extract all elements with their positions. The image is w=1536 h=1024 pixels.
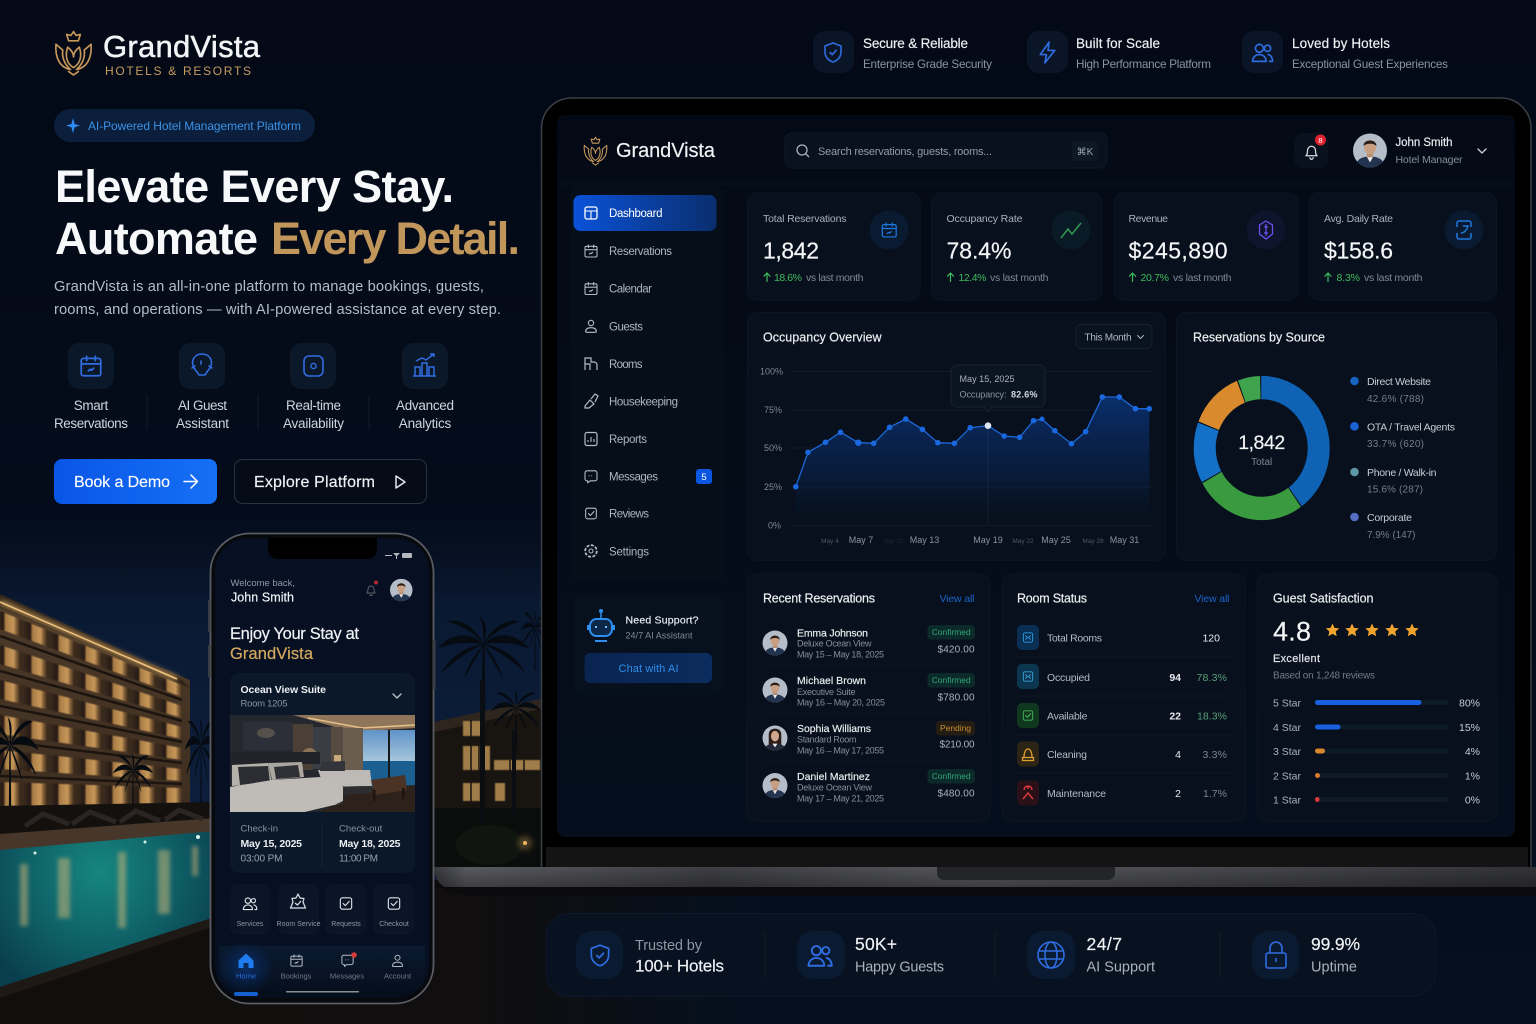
stat: trusted by hotels: 100+ Hotels bbox=[635, 956, 724, 976]
line chart: 75% bbox=[764, 405, 782, 415]
line chart: 50% bbox=[764, 443, 782, 453]
support card: Need Support? bbox=[626, 614, 699, 626]
month dropdown: This Month bbox=[1084, 332, 1132, 344]
tooltip: Occupancy: bbox=[960, 390, 1006, 400]
booking card: Ocean View Suite bbox=[240, 684, 326, 696]
panel: reservations by source bbox=[1176, 312, 1496, 560]
x axis labels: May 31 bbox=[1110, 535, 1139, 545]
donut legend: Phone / Walk-in bbox=[1367, 467, 1437, 479]
stone pool edge bbox=[0, 917, 215, 1024]
nav: housekeeping: Housekeeping bbox=[609, 397, 678, 409]
badge: scale: Built for Scale bbox=[1076, 36, 1160, 51]
row: available: Available bbox=[1047, 710, 1088, 722]
donut chart: 1,842 bbox=[1238, 432, 1285, 454]
donut legend: 7.9% (147) bbox=[1367, 530, 1416, 541]
row: occupied: Occupied bbox=[1047, 672, 1090, 684]
nav: messages with badge bbox=[585, 469, 712, 484]
panel: occupancy overview bbox=[748, 312, 1165, 560]
pool deck bbox=[0, 802, 215, 852]
check-out details: Check-out bbox=[339, 824, 383, 834]
reservation: Daniel Martinez: $480.00 bbox=[938, 788, 975, 800]
stat: trusted by hotels: Trusted by bbox=[635, 938, 703, 954]
row: available: 18.3% bbox=[1197, 710, 1227, 722]
tile: services: Services bbox=[237, 921, 264, 928]
booking card: Room 1205 bbox=[240, 698, 288, 710]
feature: real-time availability bbox=[283, 343, 344, 431]
reservation: Daniel Martinez bbox=[762, 769, 975, 804]
nav: bookings bbox=[281, 955, 312, 980]
intro paragraph: rooms, and operations — with AI-powered assistance at every step. bbox=[54, 302, 501, 318]
donut legend: Corporate bbox=[1367, 512, 1412, 524]
brand tagline: HOTELS & RESORTS bbox=[105, 64, 251, 78]
x axis labels: May 10 bbox=[883, 539, 903, 545]
donut chart: Total bbox=[1251, 457, 1272, 468]
reservation: Sophia Williams: Standard Room bbox=[797, 734, 856, 744]
row: cleaning bbox=[1017, 742, 1227, 766]
headline: Automate bbox=[55, 213, 258, 264]
badge: secure bbox=[813, 31, 992, 73]
row: occupied bbox=[1017, 664, 1227, 689]
rating bars: 4% bbox=[1465, 746, 1480, 758]
feature: smart reservations bbox=[54, 343, 128, 431]
nav: settings: Settings bbox=[609, 546, 649, 558]
tile: checkout bbox=[374, 884, 414, 935]
reservation: Sophia Williams: Sophia Williams bbox=[797, 723, 871, 735]
stat: uptime bbox=[1252, 931, 1360, 979]
nav: messages: Messages bbox=[330, 972, 364, 980]
nav: reports bbox=[585, 432, 647, 446]
hotel room photo bbox=[230, 715, 415, 812]
panel: guest satisfaction: Excellent bbox=[1273, 653, 1320, 665]
reservation: Daniel Martinez: Deluxe Ocean View bbox=[797, 782, 872, 792]
icon: arrow bbox=[184, 475, 198, 488]
feature icons row bbox=[54, 343, 454, 431]
phone: GrandVista bbox=[230, 645, 314, 663]
feature: smart reservations: Smart bbox=[74, 398, 108, 413]
reservation: Daniel Martinez: Confirmed bbox=[932, 771, 971, 781]
tile: checkout: Checkout bbox=[379, 921, 409, 928]
trust stats bar bbox=[546, 914, 1436, 996]
nav: guests bbox=[586, 320, 643, 333]
tile: services bbox=[230, 884, 270, 935]
reservation: Sophia Williams bbox=[762, 721, 975, 756]
donut legend: 33.7% (620) bbox=[1367, 439, 1424, 450]
five star rating bbox=[1326, 623, 1419, 636]
phone screen bbox=[215, 538, 429, 998]
nav: calendar bbox=[585, 282, 652, 296]
tile: room service: Room Service bbox=[277, 921, 321, 928]
stat card: occupancy rate: Occupancy Rate bbox=[946, 213, 1023, 225]
stat: uptime: Uptime bbox=[1311, 960, 1357, 976]
wooden ground bbox=[0, 880, 760, 1024]
row: available bbox=[1017, 703, 1227, 728]
rating bars: 0% bbox=[1465, 794, 1480, 806]
phone: John Smith bbox=[231, 590, 294, 604]
panel: reservations by source: Reservations by Source bbox=[1193, 330, 1325, 344]
search bar bbox=[785, 133, 1107, 168]
check-out details: 11:00 PM bbox=[339, 854, 378, 864]
badge: secure: Enterprise Grade Security bbox=[863, 58, 992, 71]
stat card: revenue: Revenue bbox=[1128, 213, 1168, 225]
x axis labels: May 13 bbox=[910, 535, 939, 545]
row: available: 22 bbox=[1169, 710, 1181, 722]
AI pill tag: AI-Powered Hotel Management Platform bbox=[88, 119, 301, 133]
stat card: revenue: vs last month bbox=[1173, 272, 1232, 284]
reservation: Emma Johnson: $420.00 bbox=[938, 644, 975, 656]
stat card: average daily rate bbox=[1309, 193, 1496, 300]
row: total rooms: Total Rooms bbox=[1047, 632, 1102, 644]
stat card: total reservations bbox=[748, 193, 920, 300]
nav: messages bbox=[330, 952, 364, 980]
check-in details: Check-in bbox=[240, 824, 278, 834]
nav: rooms: Rooms bbox=[609, 359, 643, 371]
stat card: total reservations: Total Reservations bbox=[763, 213, 846, 225]
stat card: average daily rate: 8.3% bbox=[1336, 272, 1360, 284]
tooltip: 82.6% bbox=[1011, 390, 1038, 400]
occupancy line bbox=[796, 397, 1149, 487]
stat card: total reservations: 1,842 bbox=[763, 238, 819, 264]
swimming pool bbox=[0, 831, 215, 987]
stat card: revenue: 20.7% bbox=[1140, 272, 1169, 284]
check-out details bbox=[339, 824, 401, 864]
stat: happy guests: Happy Guests bbox=[855, 960, 944, 976]
row: total rooms bbox=[1017, 625, 1220, 650]
phone bell bbox=[367, 580, 378, 596]
nav: home bbox=[234, 954, 258, 996]
line chart bbox=[760, 365, 1152, 545]
badge: secure: Secure & Reliable bbox=[863, 36, 968, 51]
nav: home: Home bbox=[236, 972, 256, 980]
x axis labels: May 28 bbox=[1082, 538, 1104, 545]
stat card: occupancy rate bbox=[932, 193, 1102, 300]
nav: reservations: Reservations bbox=[609, 246, 672, 258]
brand name: GrandVista bbox=[103, 29, 261, 64]
reservation: Sophia Williams: $210.00 bbox=[940, 740, 975, 750]
AI pill tag bbox=[54, 109, 315, 142]
button: explore platform bbox=[234, 460, 426, 504]
panel: guest satisfaction: 4.8 bbox=[1273, 616, 1311, 646]
panel: guest satisfaction: Guest Satisfaction bbox=[1273, 592, 1374, 606]
greeting: Welcome back, bbox=[230, 578, 295, 589]
top trust badges bbox=[813, 31, 1448, 73]
user profile bbox=[1353, 134, 1486, 168]
logo mark bbox=[56, 32, 91, 75]
button: chat with AI: Chat with AI bbox=[618, 663, 678, 675]
pool reflections bbox=[20, 846, 198, 928]
nav: calendar: Calendar bbox=[609, 284, 652, 296]
line chart: 25% bbox=[764, 482, 782, 492]
row: total rooms: 120 bbox=[1202, 632, 1220, 644]
nav: housekeeping bbox=[585, 394, 678, 409]
check-in details: May 15, 2025 bbox=[240, 838, 302, 850]
stat card: occupancy rate: vs last month bbox=[990, 272, 1049, 284]
stat card: revenue: $245,890 bbox=[1128, 238, 1228, 264]
phone body bbox=[210, 534, 434, 1004]
badge: loved bbox=[1242, 31, 1448, 73]
feature: AI guest assistant: Assistant bbox=[176, 416, 229, 431]
photo: night resort scene bbox=[0, 480, 760, 1024]
nav: dashboard active bbox=[574, 195, 716, 231]
panel: recent reservations bbox=[747, 574, 990, 821]
nav: bookings: Bookings bbox=[281, 972, 312, 980]
panel: guest satisfaction: Based on 1,248 reviews bbox=[1273, 670, 1375, 682]
area under curve bbox=[796, 397, 1149, 525]
booking card bbox=[230, 673, 415, 873]
nav: settings bbox=[585, 545, 649, 558]
chart title: Occupancy Overview bbox=[763, 330, 882, 344]
row: maintenance: Maintenance bbox=[1047, 788, 1106, 800]
donut legend: Direct Website bbox=[1367, 376, 1431, 388]
row: occupied: 94 bbox=[1169, 672, 1181, 684]
feature: real-time availability: Availability bbox=[283, 416, 344, 431]
feature: advanced analytics: Analytics bbox=[399, 416, 452, 431]
stat: AI support bbox=[1027, 931, 1155, 979]
app logo bbox=[584, 137, 607, 165]
nav: rooms bbox=[585, 358, 643, 371]
nav: guests: Guests bbox=[609, 321, 643, 333]
feature: AI guest assistant: AI Guest bbox=[178, 398, 227, 413]
panel: room status bbox=[1002, 574, 1245, 821]
lounge chairs bbox=[25, 810, 203, 826]
app header: GrandVista bbox=[616, 140, 716, 162]
laptop bbox=[434, 98, 1536, 896]
quick action tiles bbox=[230, 884, 414, 935]
search bar: Search reservations, guests, rooms... bbox=[818, 146, 992, 158]
row: maintenance bbox=[1017, 780, 1227, 806]
rating bars: 15% bbox=[1459, 722, 1480, 734]
nav: reviews: Reviews bbox=[609, 508, 649, 520]
reservation: Michael Brown bbox=[762, 673, 975, 708]
intro paragraph bbox=[54, 279, 501, 318]
stat: trusted by hotels bbox=[576, 931, 724, 979]
panel: room status: View all bbox=[1194, 593, 1230, 605]
tile: requests: Requests bbox=[331, 921, 361, 928]
headline: Elevate Every Stay. bbox=[55, 161, 454, 212]
reservation: Michael Brown: Michael Brown bbox=[797, 675, 866, 687]
rating bars: 4 Star bbox=[1273, 722, 1302, 734]
phone bbox=[208, 534, 436, 1004]
nav: dashboard active: Dashboard bbox=[609, 208, 662, 220]
search bar: ⌘K bbox=[1077, 147, 1094, 158]
x axis labels: May 7 bbox=[849, 535, 873, 545]
panel: recent reservations: View all bbox=[940, 593, 974, 605]
badge: scale: High Performance Platform bbox=[1076, 58, 1211, 71]
laptop screen bbox=[557, 115, 1515, 837]
data points bbox=[793, 394, 1152, 490]
sky bbox=[0, 480, 545, 900]
badge: scale bbox=[1027, 31, 1211, 73]
tile: room service bbox=[277, 884, 321, 935]
panel: room status: Room Status bbox=[1017, 592, 1087, 606]
app header bbox=[584, 133, 1486, 168]
feature: AI guest assistant bbox=[176, 343, 229, 431]
stat card: revenue bbox=[1114, 193, 1298, 300]
button: explore platform: Explore Platform bbox=[254, 474, 375, 491]
nav: account bbox=[384, 955, 412, 980]
notch bbox=[268, 538, 377, 559]
nav: account: Account bbox=[384, 972, 412, 980]
button: chat with AI bbox=[584, 653, 712, 683]
reservation: Sophia Williams: Pending bbox=[940, 723, 971, 733]
support card bbox=[573, 595, 724, 695]
phone heading: Enjoy Your Stay at bbox=[230, 625, 359, 643]
phone avatar bbox=[390, 579, 412, 601]
stat card: total reservations: vs last month bbox=[806, 272, 864, 284]
x axis labels: May 4 bbox=[821, 538, 839, 545]
donut chart bbox=[1205, 388, 1319, 508]
stat: happy guests: 50K+ bbox=[855, 934, 897, 954]
x axis labels bbox=[821, 535, 1139, 545]
sidebar navigation bbox=[571, 185, 724, 581]
stat: happy guests bbox=[797, 931, 944, 979]
rating bars: 3 Star bbox=[1273, 746, 1302, 758]
reservation: Daniel Martinez: May 17 – May 21, 2025 bbox=[797, 794, 884, 804]
row: occupied: 78.3% bbox=[1196, 672, 1227, 684]
notifications bell bbox=[1294, 133, 1328, 168]
check-in details: 03:00 PM bbox=[240, 854, 282, 864]
panel: guest satisfaction bbox=[1257, 574, 1497, 821]
nav: reservations bbox=[585, 245, 672, 258]
hinge notch bbox=[937, 867, 1115, 880]
stat card: average daily rate: vs last month bbox=[1364, 272, 1423, 284]
hotel building bbox=[0, 594, 190, 812]
stat card: occupancy rate: 12.4% bbox=[958, 272, 986, 284]
brand logo bbox=[56, 29, 261, 78]
icon: sparkle bbox=[66, 118, 80, 133]
rating bars: 1 Star bbox=[1273, 794, 1302, 806]
donut legend bbox=[1350, 376, 1455, 541]
stat: AI support: AI Support bbox=[1086, 960, 1155, 976]
reservation: Emma Johnson bbox=[762, 625, 975, 660]
check-in details bbox=[240, 824, 302, 864]
tooltip bbox=[951, 365, 1045, 412]
check-out details: May 18, 2025 bbox=[339, 838, 401, 850]
status icons bbox=[385, 553, 412, 559]
badge: loved: Exceptional Guest Experiences bbox=[1292, 58, 1448, 71]
laptop bezel bbox=[542, 98, 1531, 868]
line chart: 100% bbox=[760, 367, 783, 377]
reservation: Michael Brown: Confirmed bbox=[932, 675, 971, 685]
feature: smart reservations: Reservations bbox=[54, 416, 128, 431]
rating bars: 1% bbox=[1465, 770, 1480, 782]
stat card: average daily rate: Avg. Daily Rate bbox=[1324, 213, 1393, 225]
reservation: Emma Johnson: Confirmed bbox=[932, 627, 971, 637]
nav: reports: Reports bbox=[609, 434, 647, 446]
reservation: Michael Brown: Executive Suite bbox=[797, 687, 856, 697]
reservation: Michael Brown: $780.00 bbox=[938, 692, 975, 704]
row: maintenance: 1.7% bbox=[1203, 788, 1227, 800]
feature: real-time availability: Real-time bbox=[286, 398, 341, 413]
donut legend: 15.6% (287) bbox=[1367, 484, 1423, 496]
rating bars: 80% bbox=[1459, 698, 1480, 710]
stat: AI support: 24/7 bbox=[1086, 934, 1122, 954]
reservation: Emma Johnson: Deluxe Ocean View bbox=[797, 638, 872, 648]
stat card: average daily rate: $158.6 bbox=[1324, 238, 1393, 264]
icon: robot bbox=[588, 610, 614, 641]
notifications bell: 8 bbox=[1318, 136, 1323, 145]
nav: messages with badge: 5 bbox=[701, 472, 707, 483]
reservation: Daniel Martinez: Daniel Martinez bbox=[797, 771, 870, 783]
stat card: occupancy rate: 78.4% bbox=[946, 238, 1012, 264]
reservation: Michael Brown: May 16 – May 20, 2025 bbox=[797, 698, 885, 708]
badge: loved: Loved by Hotels bbox=[1292, 36, 1390, 51]
headline bbox=[55, 161, 520, 264]
user profile: John Smith bbox=[1396, 137, 1452, 149]
line chart: 0% bbox=[768, 521, 781, 531]
nav: reviews bbox=[586, 508, 649, 520]
x axis labels: May 22 bbox=[1012, 538, 1034, 545]
pool lights bbox=[34, 835, 200, 854]
rating bars: 2 Star bbox=[1273, 770, 1302, 782]
row: cleaning: Cleaning bbox=[1047, 749, 1087, 761]
stat: uptime: 99.9% bbox=[1311, 934, 1360, 954]
button: book a demo: Book a Demo bbox=[74, 474, 170, 491]
stat card: total reservations: 18.6% bbox=[774, 272, 802, 284]
month dropdown bbox=[1076, 324, 1152, 348]
reservation: Emma Johnson: Emma Johnson bbox=[797, 628, 868, 640]
bottom navigation bbox=[218, 942, 425, 998]
palm trees right bbox=[438, 610, 549, 822]
headline: Every Detail. bbox=[271, 213, 520, 264]
tooltip: May 15, 2025 bbox=[960, 374, 1014, 384]
support card: 24/7 AI Assistant bbox=[626, 630, 693, 640]
x axis labels: May 19 bbox=[973, 535, 1003, 545]
feature: advanced analytics: Advanced bbox=[396, 398, 454, 413]
row: cleaning: 3.3% bbox=[1202, 749, 1227, 761]
intro paragraph: GrandVista is an all-in-one platform to manage bookings, guests, bbox=[54, 279, 484, 295]
rating bars bbox=[1273, 698, 1480, 806]
reservation: Sophia Williams: May 16 – May 17, 2055 bbox=[797, 746, 884, 756]
reservation: Emma Johnson: May 15 – May 18, 2025 bbox=[797, 650, 884, 660]
palm trees left bbox=[0, 717, 217, 812]
row: cleaning: 4 bbox=[1175, 749, 1181, 761]
donut legend: 42.6% (788) bbox=[1367, 394, 1424, 405]
x axis labels: May 25 bbox=[1041, 535, 1071, 545]
icon: play bbox=[396, 476, 405, 488]
feature: advanced analytics bbox=[396, 343, 454, 431]
laptop base bbox=[434, 867, 1536, 896]
rating bars: 5 Star bbox=[1273, 698, 1302, 710]
user profile: Hotel Manager bbox=[1396, 154, 1463, 166]
panel: recent reservations: Recent Reservations bbox=[763, 592, 875, 606]
donut legend: OTA / Travel Agents bbox=[1367, 421, 1455, 433]
row: maintenance: 2 bbox=[1175, 788, 1181, 800]
tile: requests bbox=[326, 884, 366, 935]
button: book a demo bbox=[54, 459, 217, 504]
nav: messages with badge: Messages bbox=[609, 472, 658, 484]
second building, right of phone bbox=[434, 698, 545, 870]
